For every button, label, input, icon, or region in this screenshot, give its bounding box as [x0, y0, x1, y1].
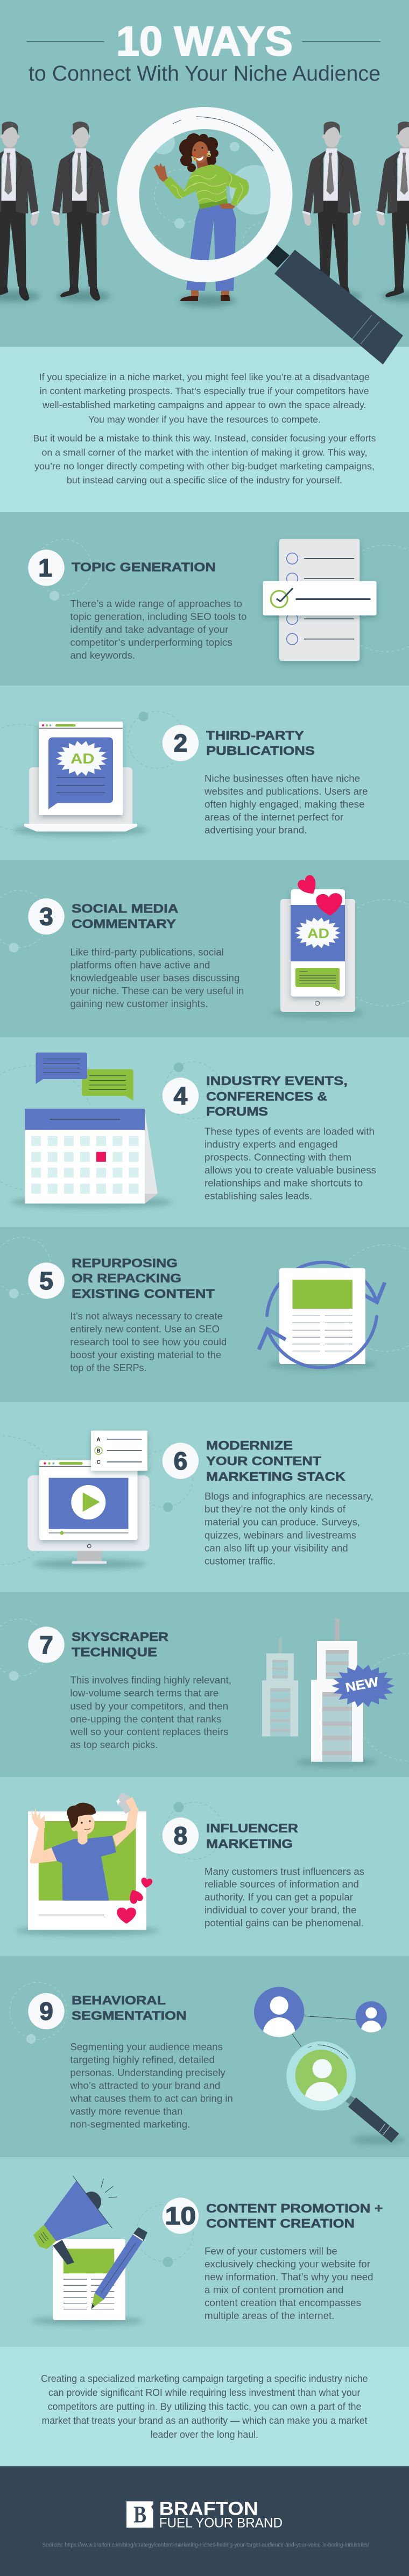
body text: as top search picks.	[70, 1739, 158, 1750]
heading: PUBLICATIONS	[206, 744, 315, 758]
heading: CONTENT CREATION	[206, 2216, 355, 2230]
intro paragraph 2: But it would be a mistake to think this way. Instead, consider focusing your efforts	[33, 433, 376, 444]
heading: REPURPOSING	[72, 1256, 178, 1270]
number badge 9	[28, 1993, 65, 2029]
heading: FORUMS	[206, 1104, 268, 1118]
body text	[69, 1674, 231, 1750]
number badge 2: 2	[174, 729, 187, 757]
heading: THIRD-PARTY	[206, 728, 304, 742]
heading: BEHAVIORAL	[72, 1993, 166, 2007]
body text	[204, 2245, 373, 2321]
body text: platforms often have active and	[70, 959, 210, 971]
illustration: monitor with video and quiz: B	[96, 1448, 101, 1454]
intro paragraph 1: If you specialize in a niche market, you might feel like you’re at a disadvantage	[39, 372, 370, 382]
panel: closing paragraph: can provide significant ROI while requiring less investment than what your	[48, 2387, 360, 2398]
body text: non-segmented marketing.	[70, 2118, 190, 2130]
number badge 10: 10	[165, 2202, 196, 2230]
body text: prospects. Connecting with them	[204, 1152, 351, 1163]
body text: boost your existing material to the	[70, 1349, 221, 1360]
body text	[204, 1866, 364, 1929]
body text: There’s a wide range of approaches to	[70, 598, 242, 609]
body text: Segmenting your audience means	[70, 2041, 223, 2052]
sources: Sources: https://www.brafton.com/blog/strategy/content-marketing-niches-finding-your-target-audience-and-your-voice-in-boring-industries/	[42, 2542, 370, 2549]
logo: Brafton mark	[126, 2501, 153, 2528]
body text: and keywords.	[70, 650, 135, 661]
panel: section 6 content marketing stack	[0, 1402, 409, 1592]
heading: OR REPACKING	[72, 1271, 181, 1285]
heading: TECHNIQUE	[72, 1645, 157, 1659]
number badge 10	[163, 2197, 199, 2234]
panel: closing paragraph: competitors are putting in. By utilizing this tactic, you can own a part of the	[48, 2401, 361, 2412]
number badge 5	[28, 1262, 65, 1299]
body text: identify and take advantage of your	[70, 624, 228, 635]
body text: gaining new customer insights.	[70, 998, 208, 1009]
body text: websites and publications. Users are	[204, 786, 368, 797]
heading	[206, 1074, 348, 1118]
body text: authority. If you can get a popular	[204, 1892, 353, 1903]
body text: knowledgeable user bases discussing	[70, 972, 239, 983]
logo: Brafton mark: B	[133, 2501, 146, 2528]
body text: can also lift up your visibility and	[204, 1543, 348, 1554]
heading	[206, 728, 315, 758]
illustration: skyscrapers with new badge: NEW	[344, 1674, 380, 1695]
icon: magnifying glass handle	[266, 245, 403, 365]
body text	[70, 598, 246, 661]
number badge 1	[28, 550, 65, 586]
illustration: monitor with video and quiz: C	[96, 1459, 101, 1466]
body text: competitor’s underperforming topics	[70, 637, 232, 648]
illustration: lens background	[154, 137, 270, 247]
intro paragraph 1: in content marketing prospects. That’s especially true if your competitors have	[40, 386, 369, 396]
title: 10 WAYS	[116, 18, 293, 65]
figure: woman	[154, 133, 249, 307]
intro paragraph 1: You may wonder if you have the resources to compete.	[88, 414, 321, 425]
panel: closing paragraph: Creating a specialized marketing campaign targeting a specific industry niche	[41, 2373, 368, 2384]
heading: INDUSTRY EVENTS,	[206, 1074, 348, 1088]
body text: research tool to see how you could	[70, 1336, 227, 1347]
panel: section 1 topic generation	[0, 512, 409, 686]
panel: closing paragraph: market that treats your brand as an authority — which can make you a market	[42, 2415, 368, 2426]
heading: COMMENTARY	[72, 917, 176, 931]
body text: vastly more revenue than	[70, 2106, 182, 2117]
illustration: megaphone, document and pencil	[31, 2176, 147, 2325]
body text: well so your content replaces theirs	[69, 1726, 228, 1737]
illustration: phone with ad and hearts: AD	[307, 926, 329, 941]
number badge 7	[28, 1626, 65, 1663]
figure: businessman 3	[302, 122, 362, 302]
illustration: monitor with video and quiz	[27, 1431, 150, 1569]
panel: section 9 behavioral segmentation	[10, 1982, 405, 2146]
body text: It’s not always necessary to create	[70, 1310, 223, 1322]
number badge 2	[163, 725, 199, 761]
illustration: skyscrapers with new badge	[262, 1618, 395, 1767]
body text: multiple areas of the internet.	[204, 2310, 334, 2321]
panel: closing paragraph	[0, 2347, 409, 2466]
heading	[72, 901, 179, 931]
heading	[206, 1821, 298, 1851]
intro paragraph 2: you’re no longer directly competing with other big-budget marketing campaigns,	[34, 461, 375, 472]
panel: section 7 skyscraper technique	[0, 1592, 409, 1777]
heading: MARKETING	[206, 1837, 293, 1851]
number badge 9: 9	[39, 1997, 53, 2025]
heading: CONTENT PROMOTION +	[206, 2201, 383, 2215]
body text: Like third-party publications, social	[70, 946, 224, 958]
panel: section 4 industry events	[0, 1037, 409, 1227]
heading: YOUR CONTENT	[206, 1454, 322, 1468]
panel: section 10 content promotion	[0, 2157, 409, 2347]
illustration: laptop with ad: AD	[70, 751, 95, 767]
heading	[206, 1438, 345, 1483]
illustration: influencer selfie frame with hearts	[16, 1793, 159, 1936]
number badge 6	[163, 1443, 199, 1479]
body text: allows you to create valuable business	[204, 1164, 376, 1175]
body text: relationships and make shortcuts to	[204, 1177, 363, 1188]
heading: CONFERENCES &	[206, 1089, 327, 1103]
intro paragraph 2: but instead carving out a specific slice of the industry for yourself.	[67, 475, 342, 486]
number badge 5: 5	[39, 1267, 53, 1295]
heading	[206, 2201, 383, 2230]
body text: This involves finding highly relevant,	[70, 1674, 231, 1686]
icon: magnifying glass ring	[128, 117, 281, 271]
intro paragraph 1: well-established marketing campaigns and appear to own the space already.	[42, 399, 366, 410]
heading	[72, 1256, 215, 1301]
heading: SKYSCRAPER	[72, 1630, 168, 1644]
figure: businessman 2	[51, 122, 110, 302]
body text: Blogs and infographics are necessary,	[204, 1490, 373, 1502]
body text: content creation that encompasses	[204, 2297, 361, 2308]
body text: industry experts and engaged	[204, 1139, 338, 1150]
body text: material you can produce. Surveys,	[204, 1516, 360, 1528]
number badge 7: 7	[39, 1631, 53, 1659]
body text: entirely new content. Use an SEO	[70, 1323, 220, 1335]
body text: exclusively checking your website for	[204, 2258, 370, 2270]
subtitle: to Connect With Your Niche Audience	[29, 62, 380, 85]
panel: section 5 repurposing	[0, 1227, 409, 1402]
number badge 8: 8	[174, 1822, 187, 1850]
heading: INFLUENCER	[206, 1821, 298, 1835]
panel: closing paragraph: leader over the long haul.	[151, 2429, 258, 2440]
body text	[204, 1126, 376, 1201]
body text: potential gains can be phenomenal.	[204, 1917, 364, 1929]
heading: SOCIAL MEDIA	[72, 901, 179, 915]
body text: Niche businesses often have niche	[204, 773, 360, 784]
heading: MARKETING STACK	[206, 1469, 345, 1483]
figure: businessman 1	[0, 122, 39, 302]
body text: areas of the internet perfect for	[204, 811, 343, 823]
body text: reliable sources of information and	[204, 1879, 359, 1889]
illustration: phone with ad and hearts	[272, 873, 363, 1018]
logo wordmark: BRAFTON	[159, 2498, 258, 2519]
panel: footer	[0, 2466, 409, 2576]
heading: TOPIC GENERATION	[72, 560, 216, 574]
body text: what causes them to act can bring in	[69, 2093, 233, 2104]
body text: often highly engaged, making these	[204, 798, 365, 810]
illustration: laptop with ad	[13, 722, 148, 836]
body text: Many customers trust influencers as	[204, 1866, 364, 1877]
body text	[70, 946, 244, 1009]
body text: used by your competitors, and then	[70, 1700, 228, 1712]
heading	[72, 1630, 168, 1659]
body text: individual to cover your brand, the	[204, 1904, 357, 1916]
tagline: FUEL YOUR BRAND	[159, 2516, 283, 2531]
illustration: document with recycling arrows	[259, 1262, 385, 1370]
heading: MODERNIZE	[206, 1438, 293, 1452]
panel: intro	[0, 347, 409, 512]
body text: targeting highly refined, detailed	[70, 2054, 215, 2065]
body text: top of the SERPs.	[70, 1362, 146, 1373]
panel: header	[0, 0, 409, 365]
body text	[204, 773, 368, 836]
body text	[204, 1490, 373, 1567]
body text	[69, 2041, 233, 2130]
panel: section 2 third-party publications	[0, 686, 409, 860]
heading: SEGMENTATION	[72, 2009, 187, 2023]
body text: new information. That’s why you need	[204, 2271, 373, 2282]
body text: advertising your brand.	[204, 824, 307, 836]
number badge 4	[163, 1078, 199, 1114]
intro paragraph 1	[39, 372, 370, 425]
heading	[72, 1993, 187, 2023]
body text: topic generation, including SEO tools to	[70, 611, 246, 622]
intro paragraph 2: on a small corner of the market with the intention of making it grow. This way,	[42, 447, 367, 458]
number badge 3: 3	[39, 902, 53, 930]
number badge 3	[28, 898, 65, 934]
illustration: calendar with speech bubbles	[11, 1053, 172, 1208]
illustration: persona network with magnifier	[254, 1987, 405, 2145]
number badge 1: 1	[38, 554, 52, 582]
intro paragraph 2	[33, 433, 376, 486]
body text: These types of events are loaded with	[204, 1126, 375, 1137]
illustration: monitor with video and quiz: A	[96, 1437, 101, 1443]
body text: personas. Understanding precisely	[70, 2067, 226, 2078]
body text: who’s attracted to your brand and	[69, 2080, 220, 2091]
body text: establishing sales leads.	[204, 1190, 312, 1201]
number badge 8	[163, 1817, 199, 1854]
body text: a mix of content promotion and	[204, 2284, 343, 2295]
illustration: checklist	[263, 539, 377, 661]
number badge 4: 4	[174, 1082, 188, 1110]
number badge 6: 6	[174, 1447, 187, 1475]
body text: one-upping the content that ranks	[70, 1714, 221, 1725]
panel: section 3 social media commentary	[0, 860, 409, 1037]
body text: low-volume search terms that are	[70, 1687, 218, 1699]
body text: quizzes, webinars and livestreams	[204, 1529, 356, 1541]
body text	[70, 1310, 227, 1373]
figure: businessman 4	[376, 122, 409, 302]
body text: but they’re not the only kinds of	[204, 1503, 346, 1515]
heading: EXISTING CONTENT	[72, 1287, 215, 1301]
body text: your niche. These can be very useful in	[70, 985, 244, 996]
body text: Few of your customers will be	[204, 2245, 337, 2257]
body text: customer traffic.	[204, 1555, 276, 1567]
panel: section 8 influencer marketing	[0, 1777, 409, 1956]
